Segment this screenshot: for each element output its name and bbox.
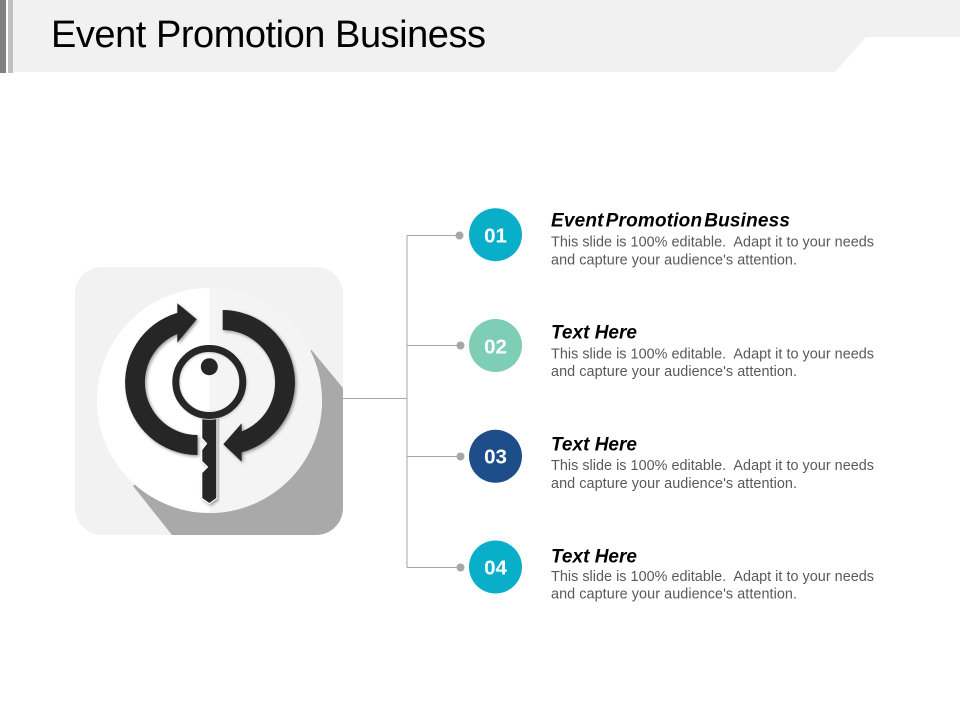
- number badge: [469, 430, 522, 483]
- body text: This slide is 100% editable. Adapt it to your needs: [551, 458, 874, 474]
- icon: key: [173, 346, 246, 503]
- number badge: 04: [484, 556, 507, 580]
- body text: This slide is 100% editable. Adapt it to your needs: [551, 569, 874, 585]
- item 02: [456, 319, 874, 380]
- heading: Event Promotion Business: [551, 210, 790, 232]
- icon: left cycle arrow: [125, 303, 198, 455]
- heading: Text Here: [551, 322, 637, 344]
- panel: key icon tile: [75, 267, 343, 535]
- body text: This slide is 100% editable. Adapt it to your needs: [551, 234, 874, 250]
- connector dot: [456, 564, 464, 572]
- item 04: [456, 540, 874, 603]
- long shadow: [133, 350, 343, 535]
- icon: right cycle arrow: [223, 310, 295, 462]
- title: Event Promotion Business: [51, 14, 486, 56]
- heading: Text Here: [551, 546, 637, 568]
- number badge: 02: [484, 336, 507, 358]
- number badge: [469, 208, 522, 261]
- number badge: 01: [484, 225, 507, 248]
- body text: [551, 346, 874, 380]
- heading: Text Here: [551, 434, 637, 456]
- connector lines: [343, 236, 459, 568]
- body text: and capture your audience's attention.: [551, 476, 797, 492]
- number badge: [469, 319, 522, 372]
- number badge: 03: [484, 446, 507, 468]
- body text: This slide is 100% editable. Adapt it to your needs: [551, 346, 874, 362]
- body text: and capture your audience's attention.: [551, 364, 797, 380]
- item 01: [456, 208, 874, 268]
- connector dot: [456, 342, 464, 350]
- number badge: [469, 540, 522, 594]
- body text: and capture your audience's attention.: [551, 587, 797, 603]
- white circle: [97, 288, 322, 513]
- item 03: [456, 430, 874, 492]
- body text: [551, 458, 874, 492]
- body text: [551, 569, 874, 603]
- connector dot: [456, 452, 464, 460]
- header band: [0, 0, 960, 73]
- connector dot: [456, 232, 464, 240]
- body text: and capture your audience's attention.: [551, 252, 797, 268]
- body text: [551, 234, 874, 268]
- tile background: [75, 267, 343, 535]
